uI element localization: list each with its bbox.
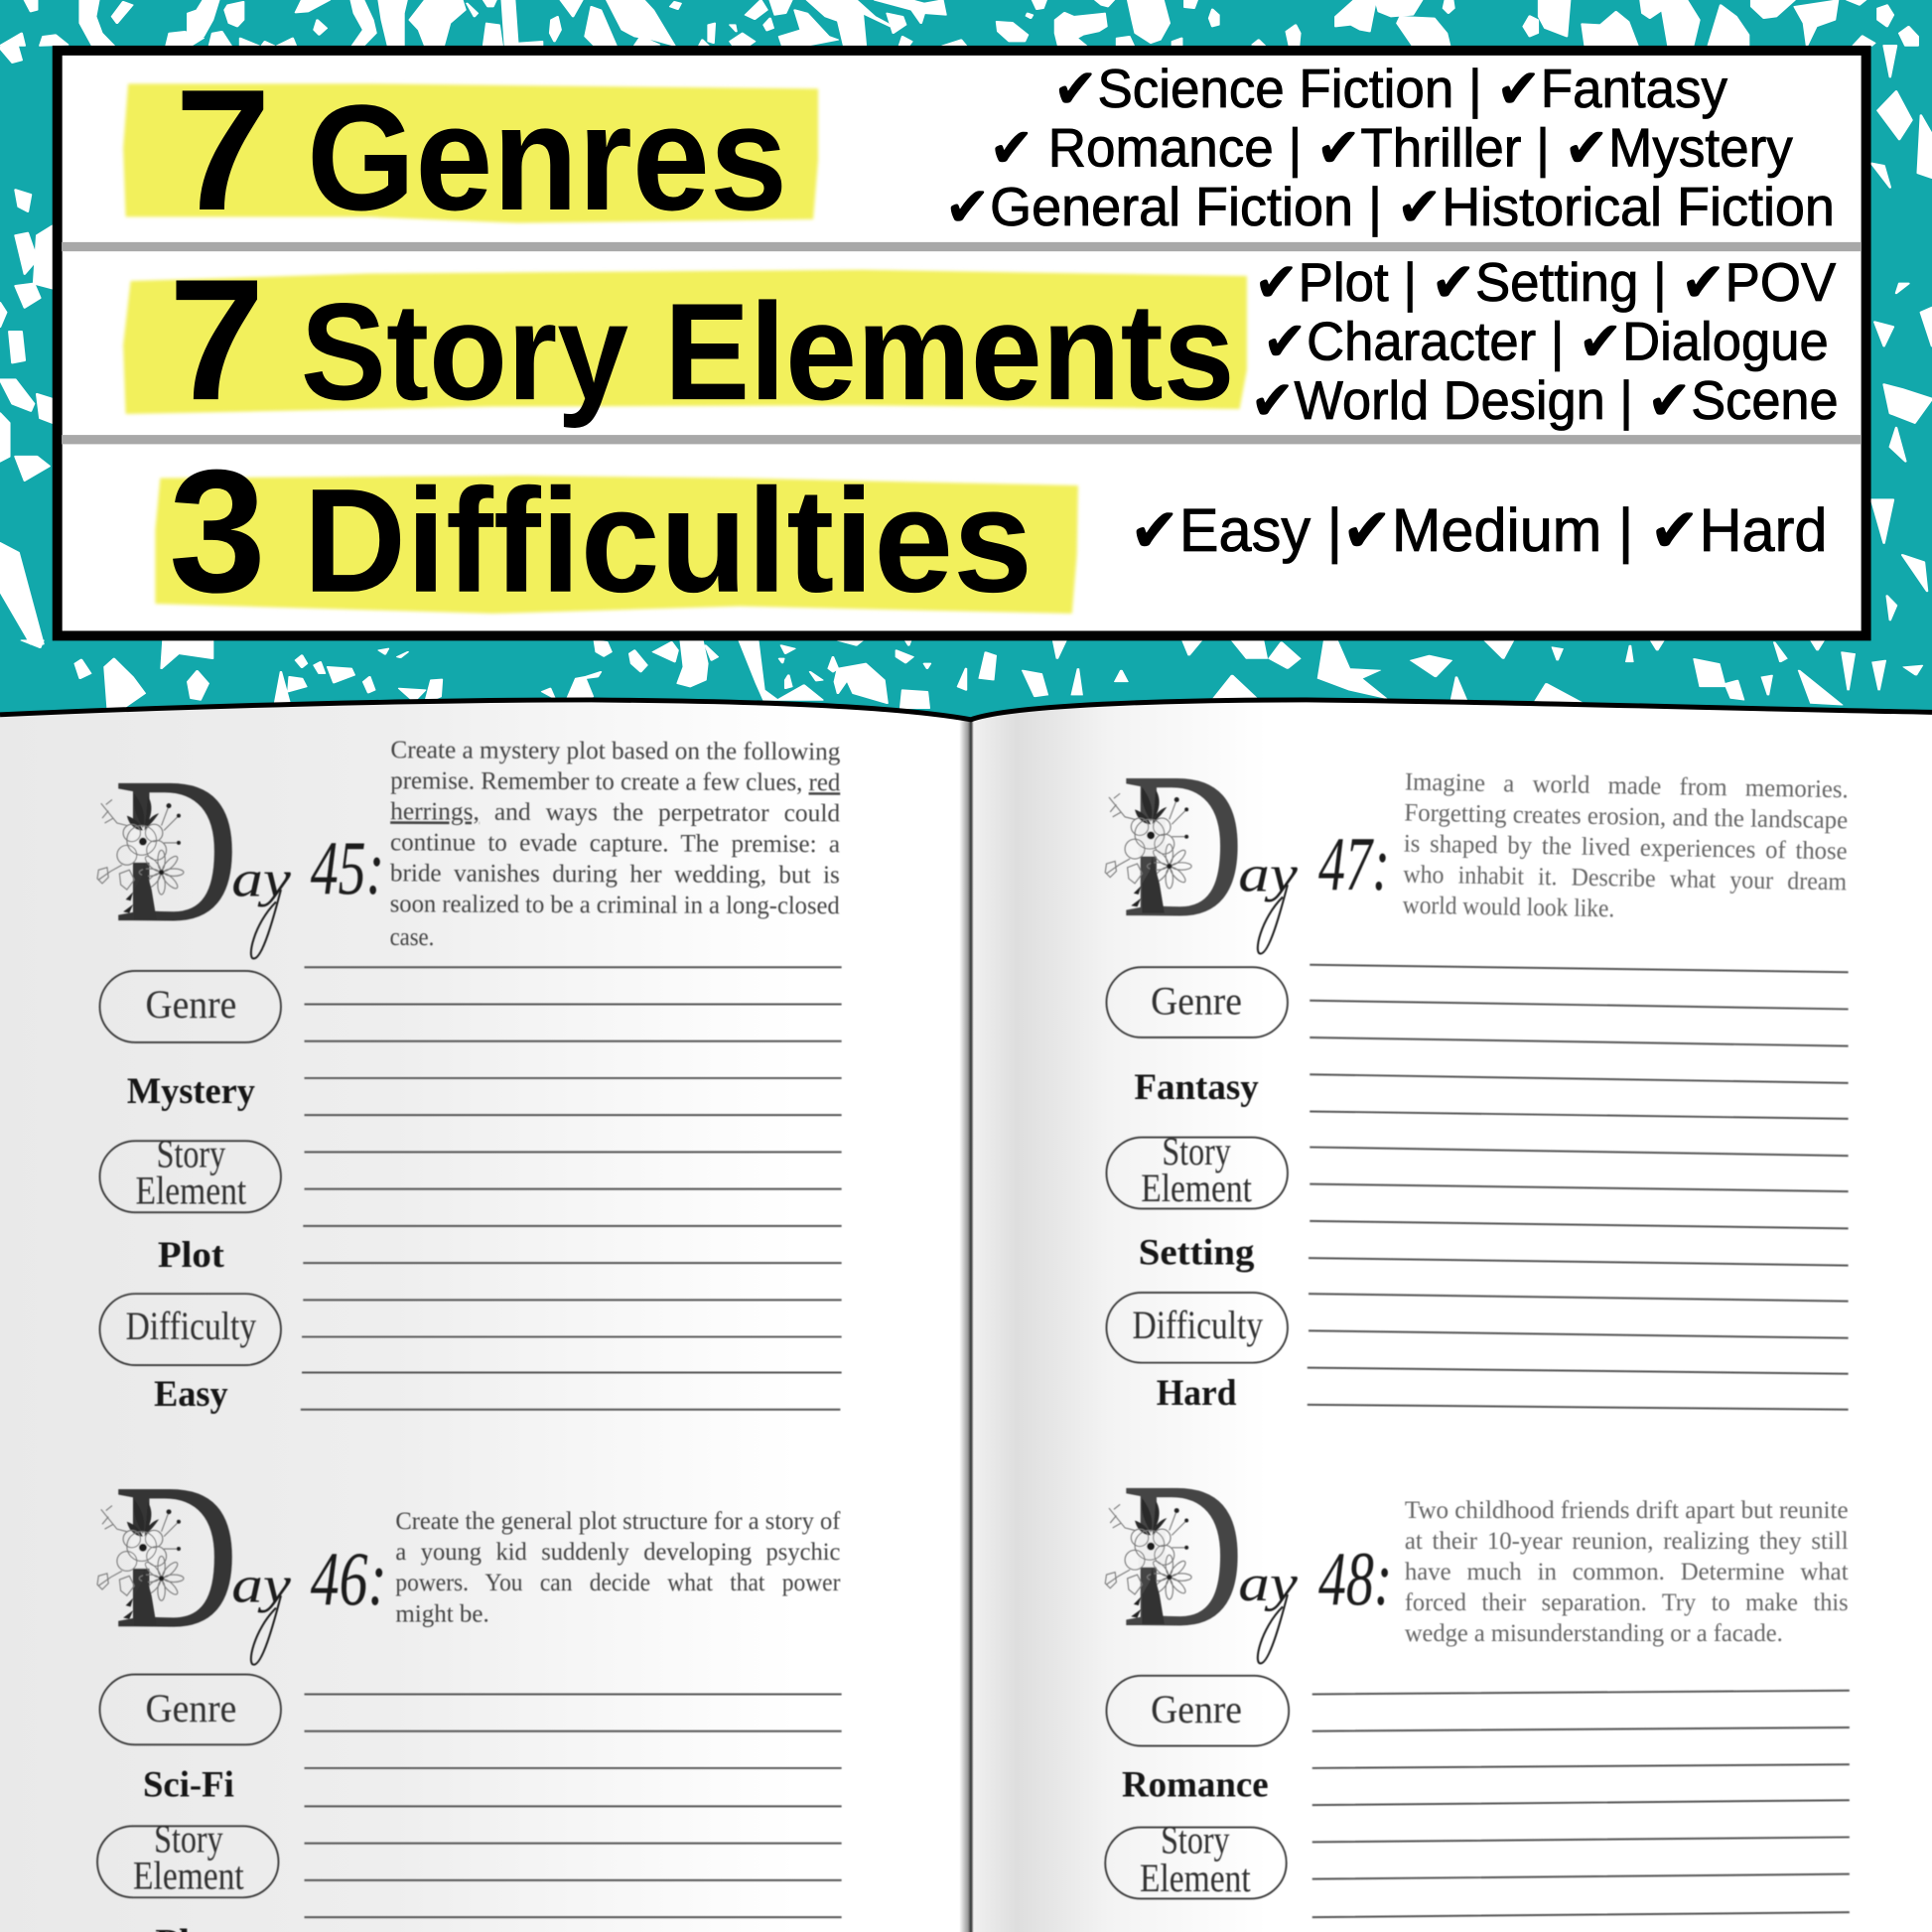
pill: Story Element xyxy=(97,1817,278,1898)
checklist: story elements: ✔World Design | ✔Scene xyxy=(1251,368,1839,432)
checklist: story elements: ✔Character | ✔Dialogue xyxy=(1263,309,1829,372)
monogram: Day 46: D xyxy=(113,1440,239,1672)
prompt text: Day 45 xyxy=(390,735,841,953)
monogram: Day 48: ay xyxy=(1238,1556,1299,1612)
checklist: story elements xyxy=(1251,250,1839,432)
monogram: Day 45: 45: xyxy=(311,825,384,910)
panel: Day 46 xyxy=(97,1440,842,1932)
monogram: Day 45: D xyxy=(113,734,239,966)
monogram: Day 47: ay xyxy=(1238,846,1299,902)
checklist: genres: ✔Science Fiction | ✔Fantasy xyxy=(1053,57,1728,120)
pill: Genre: Genre xyxy=(145,983,236,1027)
label: Sci-Fi: Sci-Fi xyxy=(143,1764,234,1805)
label: Mystery: Mystery xyxy=(127,1071,255,1112)
monogram: Day 48 xyxy=(1105,1439,1392,1671)
pill: Genre: Genre xyxy=(1151,979,1242,1023)
writing lines: Day 47 xyxy=(1308,965,1849,1410)
pill: Story Element xyxy=(1105,1819,1287,1900)
monogram: Day 47 xyxy=(1105,729,1390,961)
monogram: Day 47: D xyxy=(1121,729,1244,961)
prompt text: Day 48 xyxy=(1405,1495,1849,1647)
monogram: Day 46: ay xyxy=(231,1557,292,1613)
label: Setting: Setting xyxy=(1139,1232,1255,1273)
pill: Genre: Genre xyxy=(145,1687,236,1730)
pill: Genre xyxy=(100,1675,281,1744)
panel: Day 48 xyxy=(1105,1439,1850,1917)
label: Fantasy: Fantasy xyxy=(1134,1067,1259,1108)
writing lines: Day 48 xyxy=(1312,1691,1850,1917)
label: Hard: Hard xyxy=(1157,1373,1237,1414)
prompt text: Day 45: premise. Remember to create a few clues, red xyxy=(390,765,841,796)
monogram: Day 45: ay xyxy=(231,851,292,907)
prompt text: Day 46: might be. xyxy=(395,1598,489,1627)
prompt text: Day 47: world would look like. xyxy=(1403,891,1614,922)
heading: 7 Genres: Genres xyxy=(307,74,787,242)
pill: Story Element: Element xyxy=(136,1170,246,1213)
pill: Difficulty: Difficulty xyxy=(1133,1304,1263,1347)
highlight: 7 Genres xyxy=(123,83,818,223)
open book pages xyxy=(0,700,1932,1932)
pill: Difficulty: Difficulty xyxy=(126,1305,256,1348)
writing lines: Day 45 xyxy=(301,967,842,1410)
pill: Story Element: Element xyxy=(133,1855,244,1898)
panel: Day 45 xyxy=(97,734,842,1415)
prompt text: Day 48: at their 10-year reunion, realizing they still xyxy=(1405,1526,1849,1555)
prompt text: Day 46: Create the general plot structure for a story of xyxy=(395,1506,841,1535)
pill: Genre xyxy=(100,971,281,1042)
prompt text: Day 45: soon realized to be a criminal in a long-closed xyxy=(390,889,840,919)
panel: feature summary box xyxy=(58,51,1866,635)
pill: Story Element xyxy=(100,1132,281,1213)
heading: 7 Genres: 7 xyxy=(175,54,271,246)
pill: Story Element: Story xyxy=(154,1817,223,1861)
prompt text: Day 48: wedge a misunderstanding or a facade. xyxy=(1405,1618,1783,1647)
heading: 3 Difficulties: 3 xyxy=(169,434,266,629)
prompt text: Day 47: is shaped by the lived experiences of those xyxy=(1404,829,1848,865)
checklist: genres: ✔General Fiction | ✔Historical Fiction xyxy=(945,175,1835,238)
prompt text: Day 46: a young kid suddenly developing psychic xyxy=(395,1537,840,1566)
writing lines: Day 46 xyxy=(305,1694,842,1917)
pill: Genre xyxy=(1106,967,1288,1037)
pill: Story Element xyxy=(1106,1130,1288,1210)
checklist: story elements: ✔Plot | ✔Setting | ✔POV xyxy=(1254,250,1837,314)
highlight: 7 Story Elements xyxy=(123,270,1247,414)
prompt text: Day 45: bride vanishes during her wedding, but is xyxy=(390,858,840,889)
pill: Story Element: Element xyxy=(1140,1857,1251,1900)
monogram: Day 45 xyxy=(97,734,384,966)
label: Romance: Romance xyxy=(1122,1764,1269,1805)
prompt text: Day 45: continue to evade capture. The premise: a xyxy=(390,827,840,858)
checklist: genres: ✔ Romance | ✔Thriller | ✔Mystery xyxy=(990,116,1793,180)
label: Easy: Easy xyxy=(154,1374,228,1415)
panel: Day 47 xyxy=(1105,729,1849,1414)
monogram: Day 48: D xyxy=(1121,1439,1244,1671)
prompt text: Day 47: who inhabit it. Describe what your dream xyxy=(1403,860,1848,896)
pill: Difficulty xyxy=(1106,1293,1288,1363)
prompt text: Day 47: Imagine a world made from memories. xyxy=(1405,767,1849,803)
monogram: Day 47: 47: xyxy=(1318,821,1390,906)
pill: Genre: Genre xyxy=(1151,1688,1242,1731)
monogram: Day 46: 46: xyxy=(311,1536,387,1621)
heading: 3 Difficulties: Difficulties xyxy=(303,458,1033,623)
pill: Story Element: Story xyxy=(1161,1819,1230,1863)
label: Plot: Plot xyxy=(158,1235,224,1276)
highlight: 3 Difficulties xyxy=(155,476,1078,614)
prompt text: Day 45: herrings, and ways the perpetrator could xyxy=(390,796,841,827)
heading: 7 Story Elements: 7 xyxy=(169,243,265,436)
pill: Genre xyxy=(1106,1676,1289,1746)
heading: 7 Story Elements: Story Elements xyxy=(301,275,1235,429)
monogram: Day 48: 48: xyxy=(1318,1536,1392,1621)
prompt text: Day 45: Create a mystery plot based on the following xyxy=(390,735,841,765)
pill: Story Element: Story xyxy=(1162,1130,1231,1173)
prompt text: Day 48: Two childhood friends drift apart but reunite xyxy=(1405,1495,1849,1524)
pill: Story Element: Element xyxy=(1141,1167,1252,1210)
heading: 7 Story Elements xyxy=(169,243,1235,436)
heading: 3 Difficulties xyxy=(169,434,1033,629)
prompt text: Day 47: Forgetting creates erosion, and the landscape xyxy=(1404,798,1848,834)
prompt text: Day 46: powers. You can decide what that power xyxy=(395,1568,841,1596)
prompt text: Day 48: have much in common. Determine what xyxy=(1405,1557,1849,1586)
pill: Difficulty xyxy=(100,1294,281,1365)
checklist: genres xyxy=(945,57,1835,238)
prompt text: Day 45: case. xyxy=(390,922,434,951)
checklist: difficulties: ✔Easy |✔Medium | ✔Hard xyxy=(1130,496,1828,566)
prompt text: Day 48: forced their separation. Try to make this xyxy=(1405,1587,1849,1616)
pill: Story Element: Story xyxy=(157,1132,225,1175)
prompt text: Day 47 xyxy=(1403,767,1849,926)
prompt text: Day 46 xyxy=(395,1506,841,1627)
heading: 7 Genres xyxy=(175,54,787,246)
monogram: Day 46 xyxy=(97,1440,387,1672)
